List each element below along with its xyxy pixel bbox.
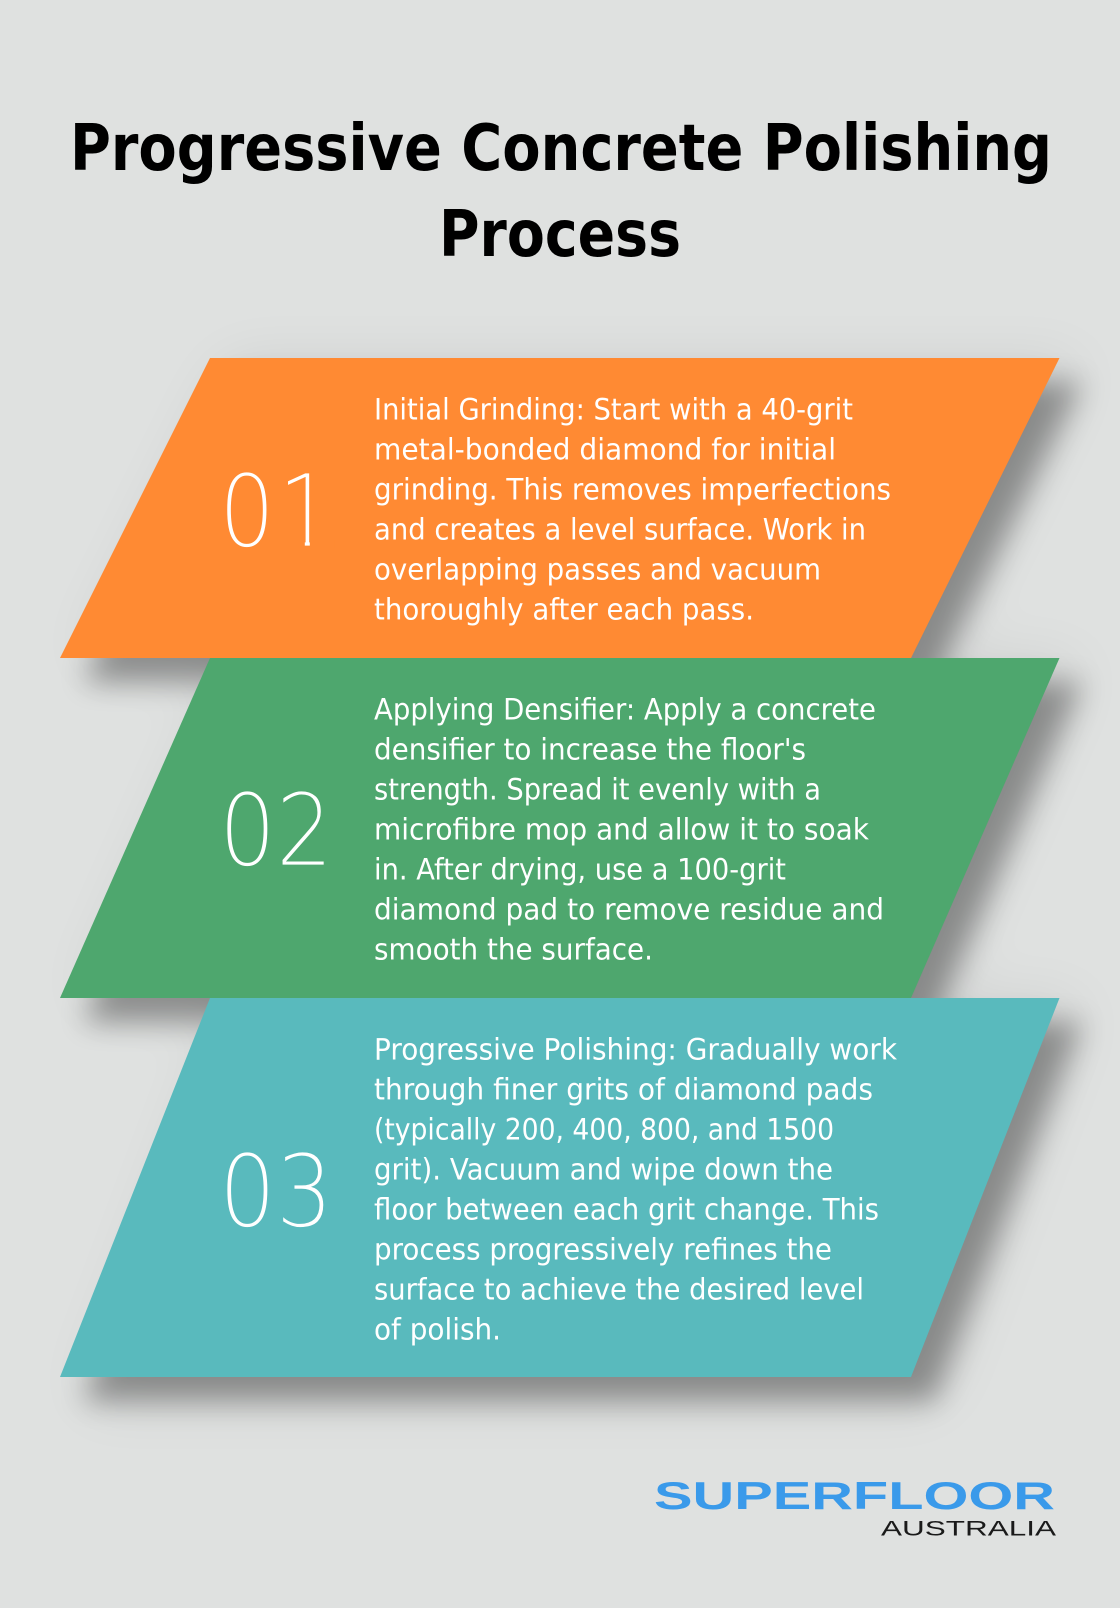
logo: Superfloor Australia: SUPERFLOOR	[654, 1475, 1055, 1518]
logo: Superfloor Australia	[654, 1475, 1056, 1540]
step number 02: 02	[219, 772, 333, 889]
step 02 description	[374, 692, 884, 966]
step 03 description: through finer grits of diamond pads	[374, 1072, 873, 1106]
step 03 description: grit). Vacuum and wipe down the	[374, 1152, 833, 1186]
step number 01: 01	[219, 455, 334, 570]
panel: step 02 applying densifier	[60, 658, 1060, 998]
step 01 description: and creates a level surface. Work in	[374, 512, 866, 546]
step 01 description: metal-bonded diamond for initial	[374, 432, 836, 466]
step 03 description: (typically 200, 400, 800, and 1500	[374, 1112, 834, 1146]
step 02 description: diamond pad to remove residue and	[374, 892, 884, 926]
step 01 description: grinding. This removes imperfections	[374, 472, 891, 506]
step 01 description: thoroughly after each pass.	[374, 592, 754, 626]
logo: Superfloor Australia: AUSTRALIA	[881, 1518, 1056, 1540]
step 03 description: of polish.	[374, 1312, 501, 1346]
step 02 description: microfibre mop and allow it to soak	[374, 812, 869, 846]
step 02 description: Applying Densifier: Apply a concrete	[374, 692, 876, 726]
step 03 description: floor between each grit change. This	[374, 1192, 879, 1226]
panel: step 01 initial grinding	[60, 358, 1060, 658]
step number 03: 03	[219, 1133, 333, 1250]
step 03 description	[374, 1032, 897, 1346]
step 03 description: Progressive Polishing: Gradually work	[374, 1032, 897, 1066]
step 02 description: in. After drying, use a 100-grit	[374, 852, 786, 886]
step 01 description: Initial Grinding: Start with a 40-grit	[374, 392, 853, 426]
panel shadows	[82, 362, 1082, 1403]
step 01 description: overlapping passes and vacuum	[374, 552, 821, 586]
panel background: green	[60, 658, 1060, 998]
title: Process	[439, 198, 681, 272]
panel background: orange	[60, 358, 1060, 658]
step 02 description: densifier to increase the floor's	[374, 732, 806, 766]
step 01 description	[374, 392, 891, 626]
step 03 description: surface to achieve the desired level	[374, 1272, 864, 1306]
step 02 description: strength. Spread it evenly with a	[374, 772, 821, 806]
panel background: teal	[60, 998, 1060, 1377]
title	[70, 112, 1052, 272]
step 02 description: smooth the surface.	[374, 932, 653, 966]
step 03 description: process progressively refines the	[374, 1232, 832, 1266]
panel: step 03 progressive polishing	[60, 998, 1060, 1377]
